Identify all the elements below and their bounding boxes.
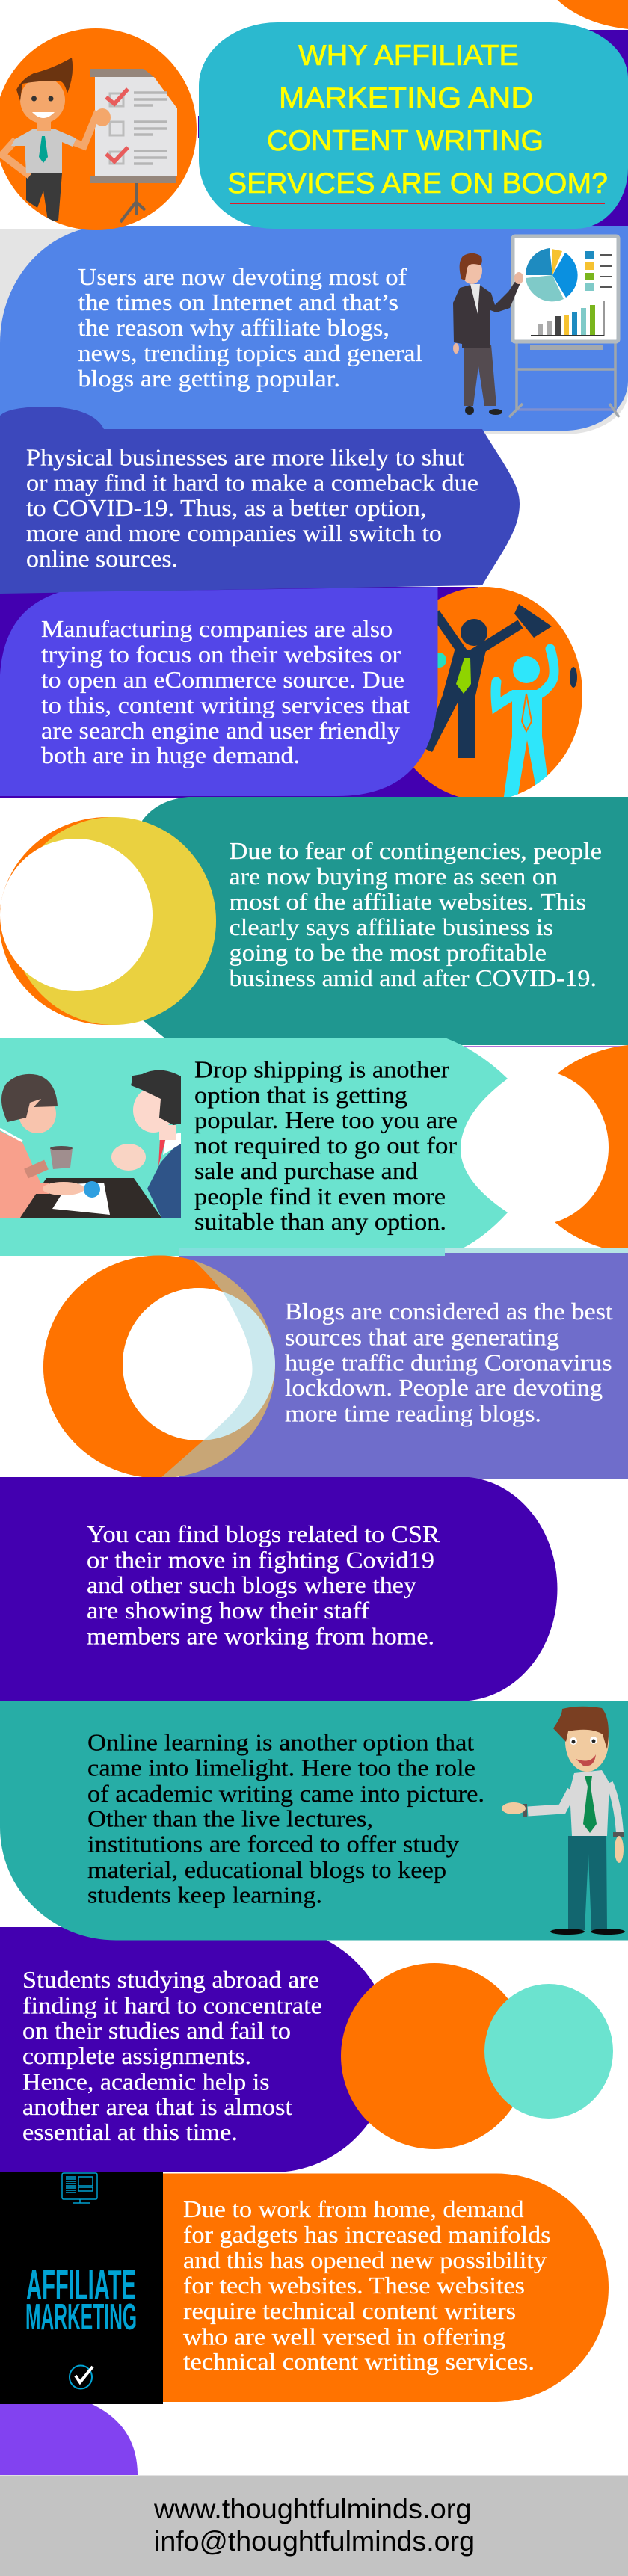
text: students abroad: finding it hard to concentrate (22, 1991, 322, 2018)
text: physical businesses: online sources. (26, 545, 178, 572)
text: online learning: of academic writing came into picture. (87, 1780, 484, 1807)
text: blogs considered (285, 1298, 613, 1426)
footer: www.thoughtfulminds.org (153, 2494, 471, 2524)
decoration: purple block behind title (198, 30, 628, 226)
text: drop shipping: popular. Here too you are (194, 1106, 458, 1133)
text: CSR blogs: You can find blogs related to CSR (87, 1520, 440, 1547)
text: work from home: for gadgets has increased manifolds (183, 2221, 550, 2248)
icon: two figures in orange circle (413, 587, 582, 797)
text: students abroad: complete assignments. (22, 2042, 251, 2069)
decoration: orange ring (43, 1256, 275, 1479)
panel: violet (0, 587, 438, 796)
text: work from home: for tech websites. These websites (183, 2272, 525, 2299)
text: users devoting: blogs are getting popular. (78, 365, 340, 392)
text: fear of contingencies: are now buying more as seen on (229, 863, 558, 890)
text: users devoting: the times on Internet and that’s (78, 289, 398, 315)
text: drop shipping: suitable than any option. (194, 1208, 446, 1235)
text: drop shipping: sale and purchase and (194, 1157, 418, 1184)
text: fear of contingencies: business amid and after COVID-19. (229, 964, 597, 991)
text: drop shipping: Drop shipping is another (194, 1056, 449, 1082)
panel: purple (0, 1477, 557, 1701)
text: students abroad: essential at this time. (22, 2119, 238, 2145)
decoration: right orange ring (461, 1044, 628, 1254)
decoration: orange and mint circles (341, 1963, 613, 2149)
text: fear of contingencies: clearly says affiliate business is (229, 913, 553, 940)
text: work from home: who are well versed in offering (183, 2323, 505, 2350)
title panel (199, 22, 628, 229)
text: students abroad: Hence, academic help is (22, 2068, 269, 2095)
text: users devoting: Users are now devoting most of (78, 263, 407, 290)
title: CONTENT WRITING (267, 125, 544, 157)
text: manufacturing companies: to open an eCommerce source. Due (41, 666, 404, 693)
panel: dark blue (0, 407, 520, 594)
text: students abroad: on their studies and fail to (22, 2017, 291, 2044)
panel: black affiliate marketing card (0, 2172, 163, 2404)
text: work from home: and this has opened new possibility (183, 2246, 547, 2273)
text: drop shipping: people find it even more (194, 1183, 446, 1210)
text: students abroad (22, 1966, 322, 2145)
text: drop shipping: not required to go out for (194, 1132, 457, 1159)
text: users devoting: the reason why affiliate blogs, (78, 314, 390, 341)
text: physical businesses: to COVID-19. Thus, as a better option, (26, 494, 426, 521)
text: drop shipping: option that is getting (194, 1081, 407, 1108)
text: manufacturing companies: both are in huge demand. (41, 742, 300, 768)
text: online learning: Other than the live lectures, (87, 1805, 373, 1831)
text: physical businesses (26, 444, 478, 572)
text: online learning (87, 1728, 484, 1908)
text: online learning: students keep learning. (87, 1881, 322, 1908)
text: physical businesses: more and more companies will switch to (26, 520, 442, 546)
decoration: translucent band (179, 1248, 628, 1256)
panel: light violet (179, 1252, 628, 1479)
panel: dark teal (142, 797, 628, 1045)
icon: standing man gesturing (502, 1707, 625, 1935)
panel: mint (0, 1038, 508, 1256)
decoration: top-right orange circle (540, 0, 628, 30)
title underlines (230, 203, 605, 212)
text: physical businesses: or may find it hard to make a comeback due (26, 469, 478, 496)
panel: black affiliate marketing card: AFFILIATE (26, 2261, 136, 2309)
text: CSR blogs: or their move in fighting Covid19 (87, 1546, 434, 1573)
text: work from home: technical content writing services. (183, 2348, 535, 2375)
text: drop shipping (194, 1056, 458, 1235)
text: manufacturing companies: Manufacturing companies are also (41, 615, 392, 642)
title: WHY AFFILIATE (298, 40, 519, 72)
panel: black affiliate marketing card: MARKETING (25, 2297, 137, 2338)
title (227, 40, 608, 200)
panel: orange (0, 2174, 609, 2402)
text: work from home (183, 2196, 550, 2375)
text: blogs considered: lockdown. People are devoting (285, 1374, 603, 1401)
text: users devoting: news, trending topics and general (78, 339, 422, 366)
text: blogs considered: huge traffic during Coronavirus (285, 1349, 612, 1375)
footer: info@thoughtfulminds.org (154, 2526, 475, 2557)
icon: presenter with chart whiteboard (453, 236, 619, 417)
text: fear of contingencies: Due to fear of contingencies, people (229, 837, 602, 864)
text: CSR blogs: are showing how their staff (87, 1597, 369, 1624)
text: CSR blogs: and other such blogs where they (87, 1571, 416, 1598)
decoration: purple backing block (0, 587, 478, 798)
text: online learning: material, educational blogs to keep (87, 1856, 446, 1883)
decoration: lower purple shape (0, 2404, 138, 2475)
text: CSR blogs (87, 1520, 440, 1649)
title: SERVICES ARE ON BOOM? (227, 167, 608, 200)
text: manufacturing companies (41, 615, 410, 768)
text: work from home: require technical content writers (183, 2297, 516, 2324)
text: blogs considered: Blogs are considered as the best (285, 1298, 613, 1325)
text: work from home: Due to work from home, demand (183, 2196, 523, 2222)
text: physical businesses: Physical businesses are more likely to shut (26, 444, 464, 471)
text: fear of contingencies: most of the affiliate websites. This (229, 888, 586, 915)
text: fear of contingencies (229, 837, 602, 991)
icon: two people meeting at a table (0, 1070, 181, 1218)
text: online learning: came into limelight. Here too the role (87, 1754, 475, 1781)
text: online learning: Online learning is another option that (87, 1728, 474, 1755)
footer (0, 2476, 628, 2576)
text: CSR blogs: members are working from home. (87, 1622, 434, 1649)
panel: blue (0, 226, 628, 431)
panel: grey backing (0, 229, 628, 434)
decoration: yellow and orange crescent (0, 817, 216, 1025)
title: MARKETING AND (279, 82, 533, 114)
text: manufacturing companies: trying to focus on their websites or (41, 641, 401, 668)
text: students abroad: another area that is almost (22, 2093, 292, 2120)
text: blogs considered: more time reading blogs. (285, 1399, 541, 1426)
panel: purple lower (0, 1927, 392, 2172)
text: fear of contingencies: going to be the most profitable (229, 939, 547, 966)
text: manufacturing companies: to this, content writing services that (41, 691, 410, 718)
text: users devoting (78, 263, 422, 392)
panel: sea green (0, 1701, 628, 1941)
text: blogs considered: sources that are generating (285, 1323, 559, 1350)
text: students abroad: Students studying abroad are (22, 1966, 319, 1993)
icon: presenter with checklist in orange circle (0, 28, 197, 230)
text: online learning: institutions are forced to offer study (87, 1830, 459, 1857)
text: manufacturing companies: are search engine and user friendly (41, 717, 400, 744)
